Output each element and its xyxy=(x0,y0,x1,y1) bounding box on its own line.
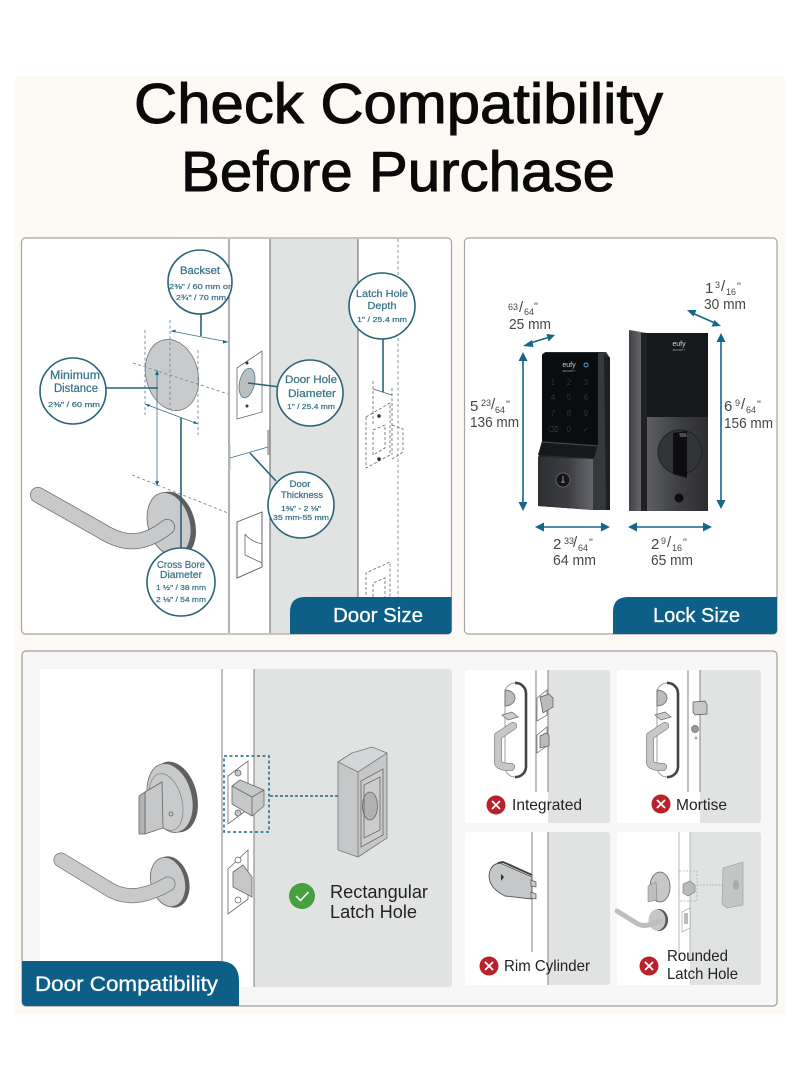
dimension label: deadbolt height: 6 xyxy=(724,398,732,415)
lever handle xyxy=(61,852,195,912)
dimension label: keypad width: " xyxy=(589,537,593,549)
dimension label: keypad height xyxy=(470,396,519,431)
dimension label: keypad height: " xyxy=(506,399,510,411)
keypad lock product: ⌫ xyxy=(547,425,559,434)
card: integrated: Integrated xyxy=(512,797,582,814)
dimension label: keypad depth xyxy=(508,299,551,333)
dimension label: deadbolt depth: " xyxy=(737,281,741,293)
dimension label: deadbolt width: " xyxy=(683,537,687,549)
dimension label: deadbolt height: 156 mm xyxy=(724,415,773,432)
check icon and rectangular latch hole label: Rectangular xyxy=(330,881,428,902)
dimension label: deadbolt width: 16 xyxy=(672,543,682,553)
callout: door thickness: Thickness xyxy=(281,490,324,500)
dimension label: keypad width: 33 xyxy=(564,536,574,546)
callout: backset: 2⅜" / 60 mm or xyxy=(169,282,232,291)
dimension label: deadbolt depth: / xyxy=(721,278,726,295)
card: rounded latch hole xyxy=(617,832,761,985)
label tab: door size: Door Size xyxy=(333,605,423,627)
dimension label: keypad depth: 25 mm xyxy=(509,316,551,333)
keypad lock product: ✓ xyxy=(583,425,589,434)
dimension label: keypad depth: / xyxy=(519,299,524,316)
callout: door hole diameter: Diameter xyxy=(288,388,336,400)
keypad lock product: 4 xyxy=(551,393,556,402)
keypad lock product: SECURITY xyxy=(563,370,576,373)
dimension arrows xyxy=(518,310,726,532)
dimension label: deadbolt height: 9 xyxy=(735,398,740,408)
keypad lock product: 0 xyxy=(567,425,572,434)
dimension label: keypad width: 64 mm xyxy=(553,552,596,569)
deadbolt exterior product: eufy xyxy=(672,341,686,348)
dimension label: keypad height: 64 xyxy=(495,405,505,415)
card: rim cylinder xyxy=(465,832,610,985)
strike plates xyxy=(228,351,270,578)
dimension label: deadbolt height: / xyxy=(741,396,746,413)
dimension label: keypad height: 5 xyxy=(470,398,478,415)
dimension label: deadbolt depth: 30 mm xyxy=(704,296,746,313)
dimension label: keypad width: 2 xyxy=(553,536,561,553)
keypad lock product: 7 xyxy=(551,409,556,418)
card: mortise xyxy=(617,670,761,823)
dimension label: deadbolt width: 65 mm xyxy=(651,552,693,569)
card: mortise: Mortise xyxy=(676,797,727,814)
lower latch xyxy=(228,850,252,914)
door edge rectangular hole xyxy=(338,747,387,857)
callout: minimum distance: Minimum xyxy=(50,370,100,382)
leader lines xyxy=(106,314,383,549)
keypad lock product: 8 xyxy=(567,409,572,418)
deadbolt exterior product xyxy=(629,330,708,511)
callout: cross bore diameter: Cross Bore xyxy=(157,559,205,571)
callout: cross bore diameter: 1 ½" / 38 mm xyxy=(156,583,206,592)
label tab: door size xyxy=(290,597,452,634)
dimension label: deadbolt height: " xyxy=(757,399,761,411)
callout: backset: 2¾" / 70 mm xyxy=(176,293,226,302)
dimension label: keypad height: 23 xyxy=(481,398,491,408)
title: Check Compatibility xyxy=(134,72,664,136)
card: rounded latch hole: Rounded xyxy=(667,948,728,965)
dimension label: keypad width xyxy=(553,534,596,569)
dimension label: deadbolt depth: 3 xyxy=(715,280,720,290)
callout: door hole diameter: 1" / 25.4 mm xyxy=(287,402,335,411)
keypad lock product: eufy xyxy=(562,362,576,369)
dimension label: deadbolt height: 64 xyxy=(746,405,756,415)
title xyxy=(134,72,664,204)
callout: door thickness xyxy=(268,472,334,538)
dimension label: keypad height: / xyxy=(491,396,496,413)
thumbturn xyxy=(139,757,205,837)
deadbolt exterior product: SECURITY xyxy=(673,349,686,352)
callout: latch hole depth: Latch Hole xyxy=(356,288,408,300)
dimension label: deadbolt depth: 1 xyxy=(705,280,713,297)
dimension label: keypad width: 64 xyxy=(578,543,588,553)
latch with highlight box xyxy=(224,756,338,832)
panel: door size xyxy=(22,238,452,634)
dimension label: keypad height: 136 mm xyxy=(470,414,519,431)
label tab: door compatibility xyxy=(22,961,239,1006)
card: rim cylinder: Rim Cylinder xyxy=(504,958,591,975)
callout: door hole diameter xyxy=(277,360,343,426)
dimension label: deadbolt width xyxy=(651,534,693,569)
keypad lock product xyxy=(538,352,610,510)
title: Before Purchase xyxy=(181,140,615,204)
keypad lock product: 6 xyxy=(584,393,589,402)
panel: lock size xyxy=(464,238,777,634)
dimension label: keypad depth: 63 xyxy=(508,302,518,312)
dimension label: keypad depth: 64 xyxy=(524,307,534,317)
callout: door thickness: Door xyxy=(290,479,310,489)
dimension label: keypad width: / xyxy=(573,534,578,551)
dashed latch hole outline xyxy=(366,381,403,600)
check icon and rectangular latch hole label: Latch Hole xyxy=(330,901,417,922)
panel: door compatibility xyxy=(22,651,777,1006)
dimension label: deadbolt depth xyxy=(704,278,746,313)
callout: latch hole depth: 1" / 25.4 mm xyxy=(357,315,407,324)
keypad lock product: 5 xyxy=(567,393,572,402)
keypad lock product: 9 xyxy=(584,409,589,418)
callout: cross bore diameter xyxy=(147,548,215,616)
callout: door thickness: 1⅜" - 2 ⅛" xyxy=(281,506,322,513)
label tab: lock size: Lock Size xyxy=(653,605,740,627)
dimension label: deadbolt width: 2 xyxy=(651,536,659,553)
label tab: lock size xyxy=(613,597,777,634)
dimension label: deadbolt width: / xyxy=(667,534,672,551)
keypad lock product: 2 xyxy=(567,378,572,387)
callout: cross bore diameter: Diameter xyxy=(160,569,202,581)
dimension label: deadbolt depth: 16 xyxy=(726,287,736,297)
card: integrated xyxy=(465,670,610,823)
callout: latch hole depth xyxy=(349,273,415,339)
callout: minimum distance xyxy=(40,358,106,424)
keypad lock product: 1 xyxy=(551,378,556,387)
card: rounded latch hole: Latch Hole xyxy=(667,966,738,983)
door face bore disc xyxy=(132,320,228,513)
dimension label: deadbolt width: 9 xyxy=(661,536,666,546)
callout: door thickness: 35 mm-55 mm xyxy=(273,513,329,522)
callout: latch hole depth: Depth xyxy=(368,300,397,312)
keypad lock product: 3 xyxy=(584,378,589,387)
check icon and rectangular latch hole label xyxy=(289,881,428,922)
callout: minimum distance: Distance xyxy=(54,383,98,395)
main door illustration xyxy=(40,669,452,987)
callout: cross bore diameter: 2 ⅛" / 54 mm xyxy=(156,595,206,604)
label tab: door compatibility: Door Compatibility xyxy=(35,973,219,996)
callout: door hole diameter: Door Hole xyxy=(285,374,337,386)
door handle xyxy=(38,487,203,561)
callout: backset: Backset xyxy=(180,265,220,277)
dimension label: deadbolt height xyxy=(724,396,773,432)
callout: backset xyxy=(168,250,232,314)
dimension label: keypad depth: " xyxy=(534,301,538,313)
callout: minimum distance: 2⅜" / 60 mm xyxy=(48,400,100,409)
